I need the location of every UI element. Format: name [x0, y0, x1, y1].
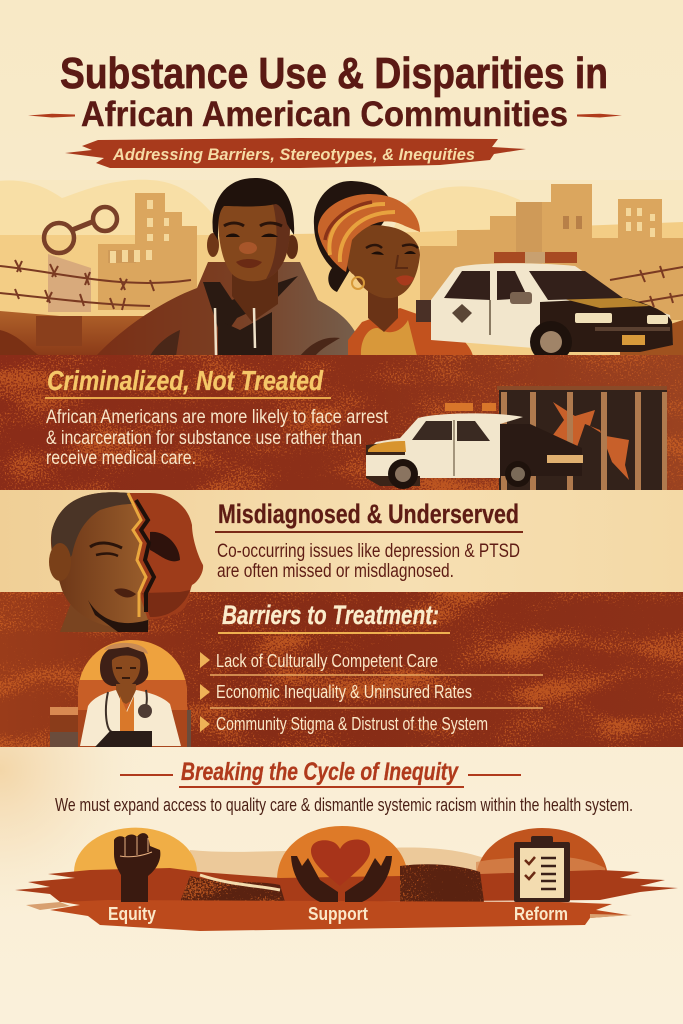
man figure [96, 178, 364, 356]
subtitle banner [65, 138, 526, 168]
body text: misdiagnosed: are often missed or misdlagnosed. [217, 561, 454, 582]
buildings [98, 184, 683, 320]
heading: misdiagnosed: Misdiagnosed & Underserved [218, 499, 519, 529]
icon: raised fist [114, 833, 160, 902]
label: reform: Reform [514, 904, 568, 924]
body text: criminalized [46, 407, 389, 469]
list item 3: Community Stigma & Distrust of the System [216, 714, 488, 734]
hero illustration [0, 178, 683, 363]
police car [416, 252, 673, 363]
icon: doctor [50, 640, 191, 747]
panel: breaking the cycle [55, 758, 633, 815]
landscape band with pillars [15, 826, 678, 931]
panel: barriers to treatment [0, 592, 683, 747]
heading: barriers: Barriers to Treatment: [222, 600, 439, 630]
body text: criminalized: African Americans are more likely to face arrest [46, 407, 389, 428]
label: support: Support [308, 904, 368, 924]
list item 1: Lack of Culturally Competent Care [216, 651, 438, 671]
heading: breaking the cycle: Breaking the Cycle of Inequity [181, 758, 459, 786]
jail cell [497, 386, 667, 490]
label: equity: Equity [108, 904, 156, 924]
woman figure [314, 181, 473, 356]
body text: criminalized: & incarceration for substance use rather than [46, 428, 362, 449]
icon: heart in hands [291, 840, 392, 902]
ground [0, 311, 144, 355]
body text: misdiagnosed: Co-occurring issues like depression & PTSD [217, 541, 520, 562]
panel: misdiagnosed and underserved [0, 490, 683, 593]
body text: misdiagnosed [217, 541, 520, 582]
title: African American Communities [81, 95, 568, 134]
icon: handcuffs [44, 207, 117, 253]
barbed wire [0, 260, 683, 310]
subtitle banner: Addressing Barriers, Stereotypes, & Inequities [112, 145, 475, 164]
police car in front of cell [366, 403, 583, 489]
icon: split face [49, 492, 203, 632]
heading: criminalized: Criminalized, Not Treated [47, 365, 324, 396]
icon: clipboard checklist [514, 836, 570, 902]
body text: criminalized: receive medical care. [46, 448, 196, 469]
list item 2: Economic Inequality & Uninsured Rates [216, 682, 472, 702]
title [28, 49, 622, 134]
panel: criminalized not treated [0, 355, 683, 491]
